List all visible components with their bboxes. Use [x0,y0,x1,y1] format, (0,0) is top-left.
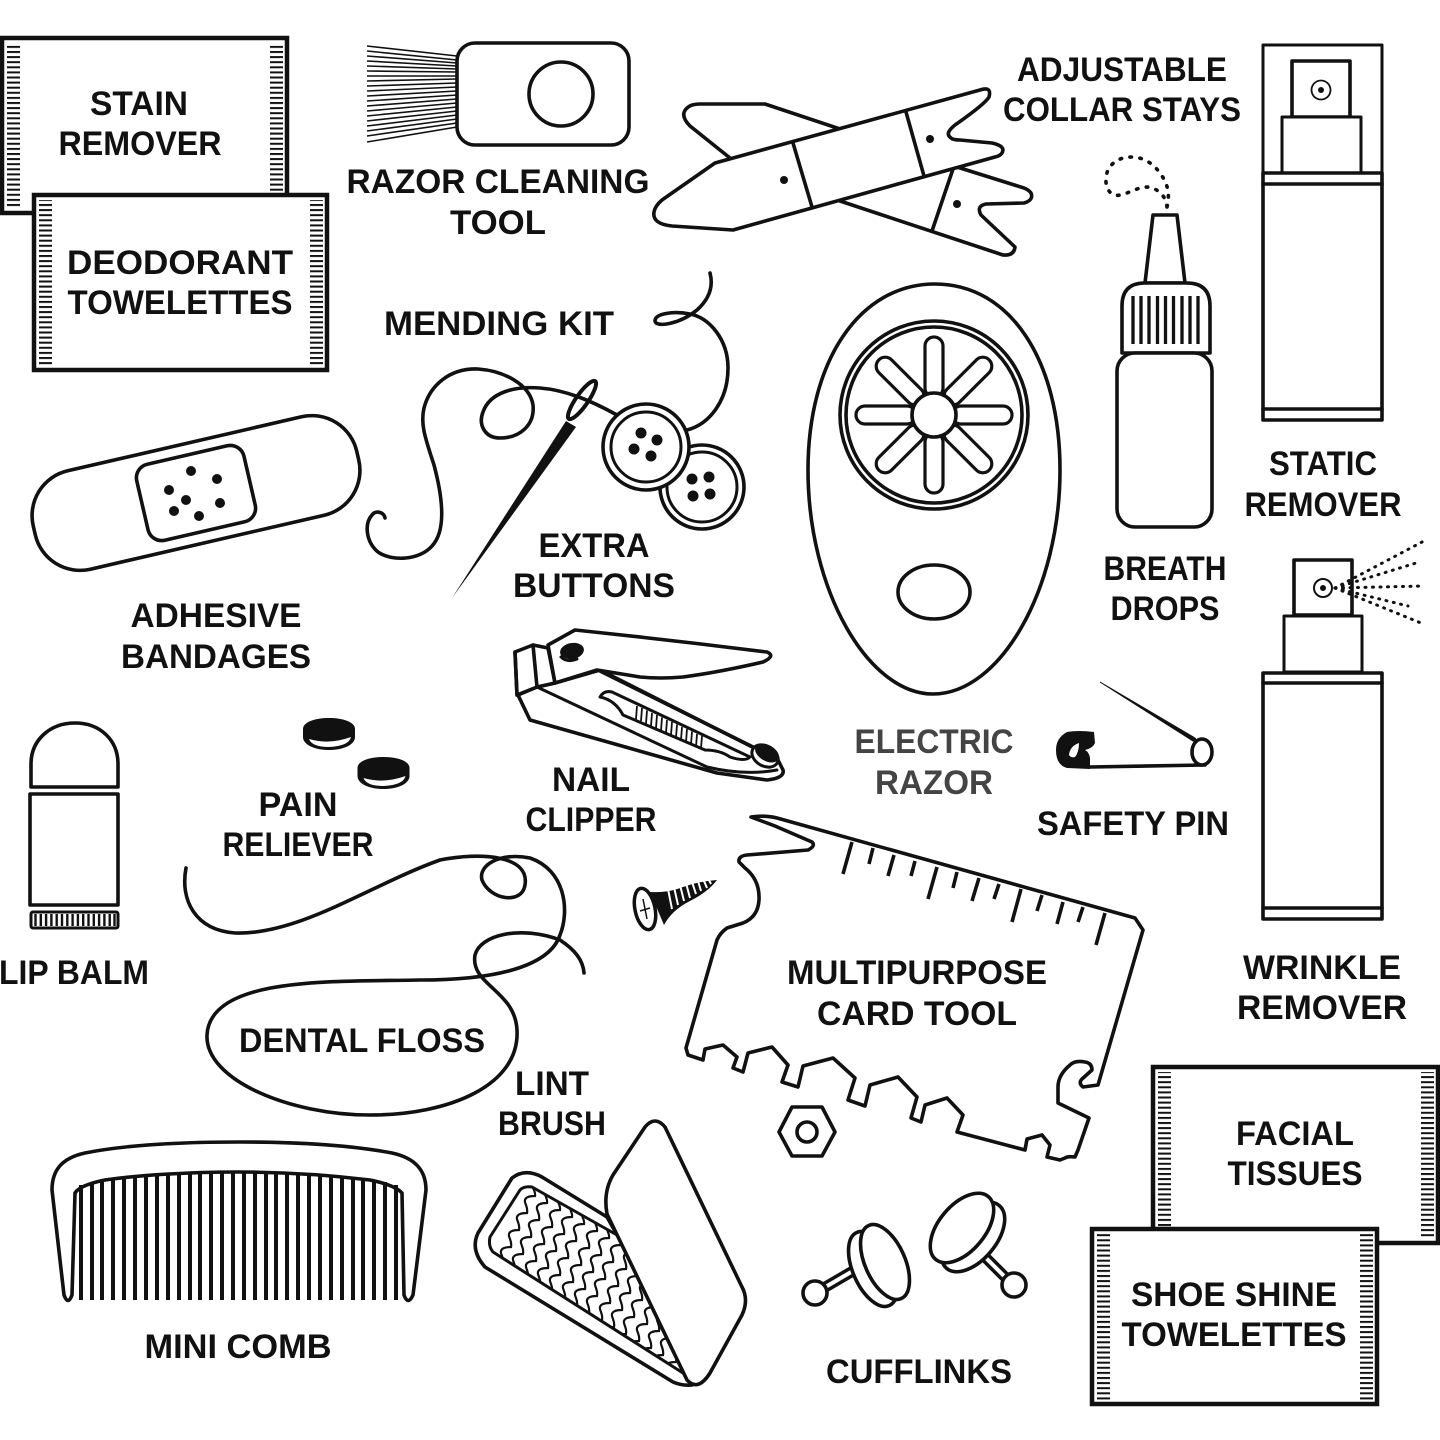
packet: facial tissues: TISSUES [1228,1155,1362,1193]
icon: multipurpose card tool [686,816,1143,1160]
icon: razor cleaning tool: TOOL [450,204,546,242]
icon: lip balm [0,723,149,992]
label: adjustable collar stays: ADJUSTABLE [1017,51,1227,89]
packet: facial tissues [1153,1067,1438,1243]
icon: adhesive bandage [23,406,369,676]
label: shoe shine towelettes: SHOE SHINE [1131,1276,1337,1314]
icon: adjustable collar stays [654,51,1241,255]
label: adhesive bandages: ADHESIVE [130,597,302,635]
icon: nail clipper [515,630,783,839]
label: nail clipper: NAIL [552,761,630,799]
label: static remover: STATIC [1269,445,1377,483]
icon: nail clipper: CLIPPER [526,801,656,839]
label: deodorant towelettes: DEODORANT [67,244,293,282]
icon: extra buttons: BUTTONS [513,567,675,605]
icon: extra buttons [513,404,744,605]
icon: breath drops bottle: DROPS [1110,590,1220,628]
label: facial tissues: FACIAL [1236,1115,1354,1153]
label: mini comb: MINI COMB [144,1328,332,1366]
icon: lint brush [475,1065,746,1402]
packet: stain remover: REMOVER [58,125,222,163]
label: pain reliever: PAIN [258,786,338,824]
icon: dental floss [185,856,584,1115]
icon: electric razor: RAZOR [875,764,993,802]
icon: static remover bottle [1244,45,1402,524]
icon: safety pin [1037,682,1229,843]
label: multipurpose card tool: MULTIPURPOSE [787,954,1047,992]
label: mending kit: MENDING KIT [384,305,614,343]
packet: shoe shine towelettes: TOWELETTES [1122,1316,1346,1354]
icon: adhesive bandage: BANDAGES [121,638,311,676]
icon: razor cleaning tool [346,43,650,242]
label: extra buttons: EXTRA [538,527,650,565]
icon: hex nut [779,1107,835,1156]
icon: wrinkle remover spray [1237,541,1424,1027]
icon: pain reliever tablets [222,718,410,864]
icon: breath drops bottle [1104,157,1226,628]
icon: lint brush: BRUSH [498,1105,606,1143]
icon: screw [631,880,717,932]
label: cufflinks: CUFFLINKS [826,1353,1012,1391]
label: lip balm: LIP BALM [0,954,149,992]
packet: deodorant towelettes [34,195,327,370]
label: safety pin: SAFETY PIN [1037,805,1229,843]
icon: pain reliever tablets: RELIEVER [222,826,374,864]
packet: deodorant towelettes: TOWELETTES [68,284,292,322]
label: wrinkle remover: WRINKLE [1243,949,1401,987]
label: dental floss: DENTAL FLOSS [239,1022,485,1060]
packet: stain remover [2,38,287,213]
icon: multipurpose card tool: CARD TOOL [817,995,1017,1033]
icon: cufflinks [803,1182,1026,1391]
packet: shoe shine towelettes [1092,1229,1377,1404]
icon: adjustable collar stays: COLLAR STAYS [1003,91,1241,129]
icon: needle and thread [367,273,728,598]
icon: wrinkle remover spray: REMOVER [1237,989,1407,1027]
icon: mini comb [52,1142,426,1366]
icon: static remover bottle: REMOVER [1244,486,1402,524]
label: lint brush: LINT [515,1065,589,1103]
icon: electric razor [808,284,1060,802]
label: stain remover: STAIN [90,85,188,123]
label: razor cleaning tool: RAZOR CLEANING [346,163,650,201]
label: breath drops: BREATH [1104,550,1226,588]
label: electric razor: ELECTRIC [854,723,1014,761]
